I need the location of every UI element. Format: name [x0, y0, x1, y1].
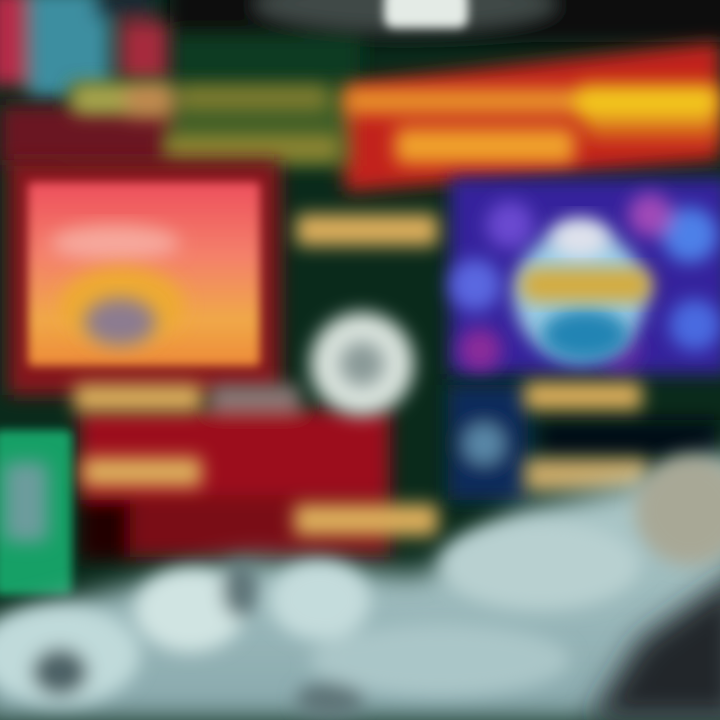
- panel: left red frame: [8, 160, 280, 395]
- panel: blue lower block: [448, 385, 720, 500]
- title text blobs: [72, 82, 720, 164]
- icon: globe: [514, 229, 646, 361]
- label pill: left upper: [74, 384, 202, 412]
- label pill: left lower: [82, 457, 202, 487]
- highlight: [50, 225, 180, 261]
- label pill: right lower: [524, 458, 648, 492]
- panel: left orange screen: [28, 182, 260, 366]
- panel: right blue screen: [449, 178, 720, 374]
- emblem: [60, 267, 184, 343]
- icon: white top emblem: [384, 0, 468, 28]
- title band: [0, 42, 720, 192]
- top dark header: [170, 0, 720, 85]
- dark bottom right corner: [590, 570, 720, 720]
- panel: green card: [0, 430, 72, 595]
- label pill: top middle: [296, 214, 438, 246]
- paper highlights and shadows: [0, 455, 720, 718]
- label pills: [74, 214, 648, 536]
- label pill: right upper: [524, 382, 642, 410]
- bottom crumpled paper pile: [0, 450, 720, 720]
- label pill: middle lower: [294, 504, 438, 536]
- panel: red lower block: [80, 385, 390, 560]
- icon: white circle: [310, 312, 414, 416]
- mosaic top left: [0, 0, 168, 98]
